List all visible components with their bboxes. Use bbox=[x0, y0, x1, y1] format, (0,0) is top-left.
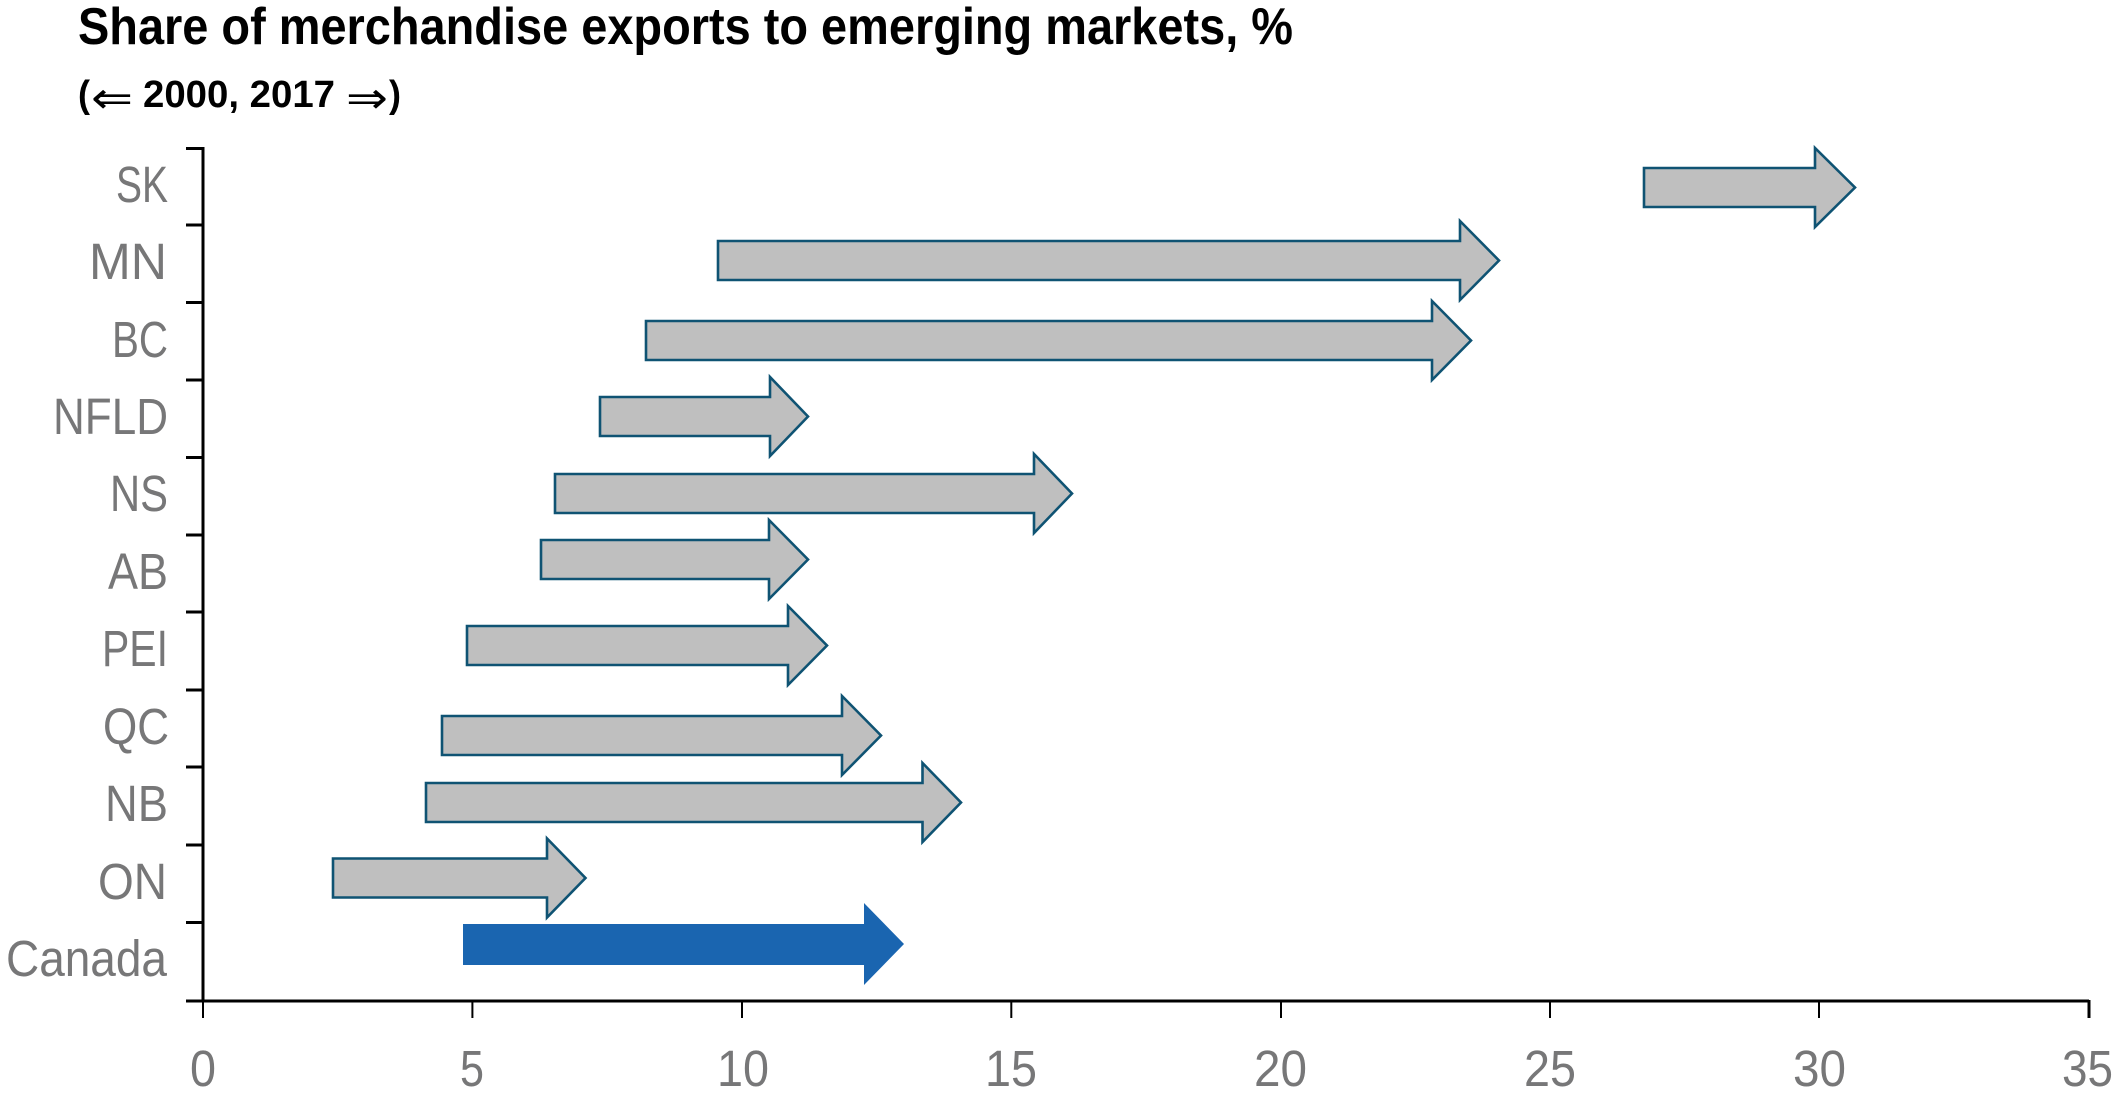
subtitle: arrow key: ⇒ bbox=[346, 73, 388, 124]
arrow: PEI bbox=[467, 606, 827, 685]
subtitle: arrow key bbox=[78, 73, 401, 124]
label: MN: MN bbox=[89, 233, 167, 290]
arrow: Canada bbox=[463, 903, 904, 985]
label: Canada: Canada bbox=[6, 930, 168, 987]
label: NFLD: NFLD bbox=[53, 388, 168, 445]
arrow: QC bbox=[442, 696, 881, 775]
tick label: 25: 25 bbox=[1524, 1040, 1576, 1097]
x axis with ticks bbox=[186, 1000, 2089, 1018]
label: BC: BC bbox=[112, 311, 168, 368]
tick label: 5: 5 bbox=[460, 1040, 484, 1097]
label: SK: SK bbox=[116, 156, 168, 213]
label: AB: AB bbox=[108, 543, 168, 600]
label: ON: ON bbox=[98, 853, 167, 910]
tick label: 15: 15 bbox=[985, 1040, 1037, 1097]
tick label: 30: 30 bbox=[1793, 1040, 1846, 1097]
arrow: NS bbox=[555, 454, 1072, 533]
arrow: BC bbox=[646, 301, 1471, 380]
x axis value labels bbox=[190, 1040, 2113, 1097]
arrow: MN bbox=[718, 221, 1499, 300]
arrow: AB bbox=[541, 520, 808, 599]
subtitle: arrow key: ⇐ bbox=[91, 73, 133, 124]
arrow: NFLD bbox=[600, 377, 808, 456]
label: NB: NB bbox=[105, 775, 168, 832]
y axis category labels bbox=[6, 156, 169, 987]
arrow: NB bbox=[426, 763, 961, 842]
y axis with ticks bbox=[186, 147, 203, 1001]
subtitle: arrow key: 2000, 2017 bbox=[143, 74, 335, 116]
tick label: 35: 35 bbox=[2062, 1040, 2113, 1097]
tick label: 10: 10 bbox=[717, 1040, 769, 1097]
label: PEI: PEI bbox=[102, 620, 168, 677]
label: QC: QC bbox=[103, 698, 169, 755]
tick label: 0: 0 bbox=[190, 1040, 216, 1097]
subtitle: arrow key: ) bbox=[389, 74, 401, 116]
subtitle: arrow key: ( bbox=[78, 74, 90, 116]
arrow: ON bbox=[333, 838, 586, 918]
tick label: 20: 20 bbox=[1254, 1040, 1307, 1097]
arrow: SK bbox=[1644, 148, 1855, 227]
label: NS: NS bbox=[110, 465, 168, 522]
